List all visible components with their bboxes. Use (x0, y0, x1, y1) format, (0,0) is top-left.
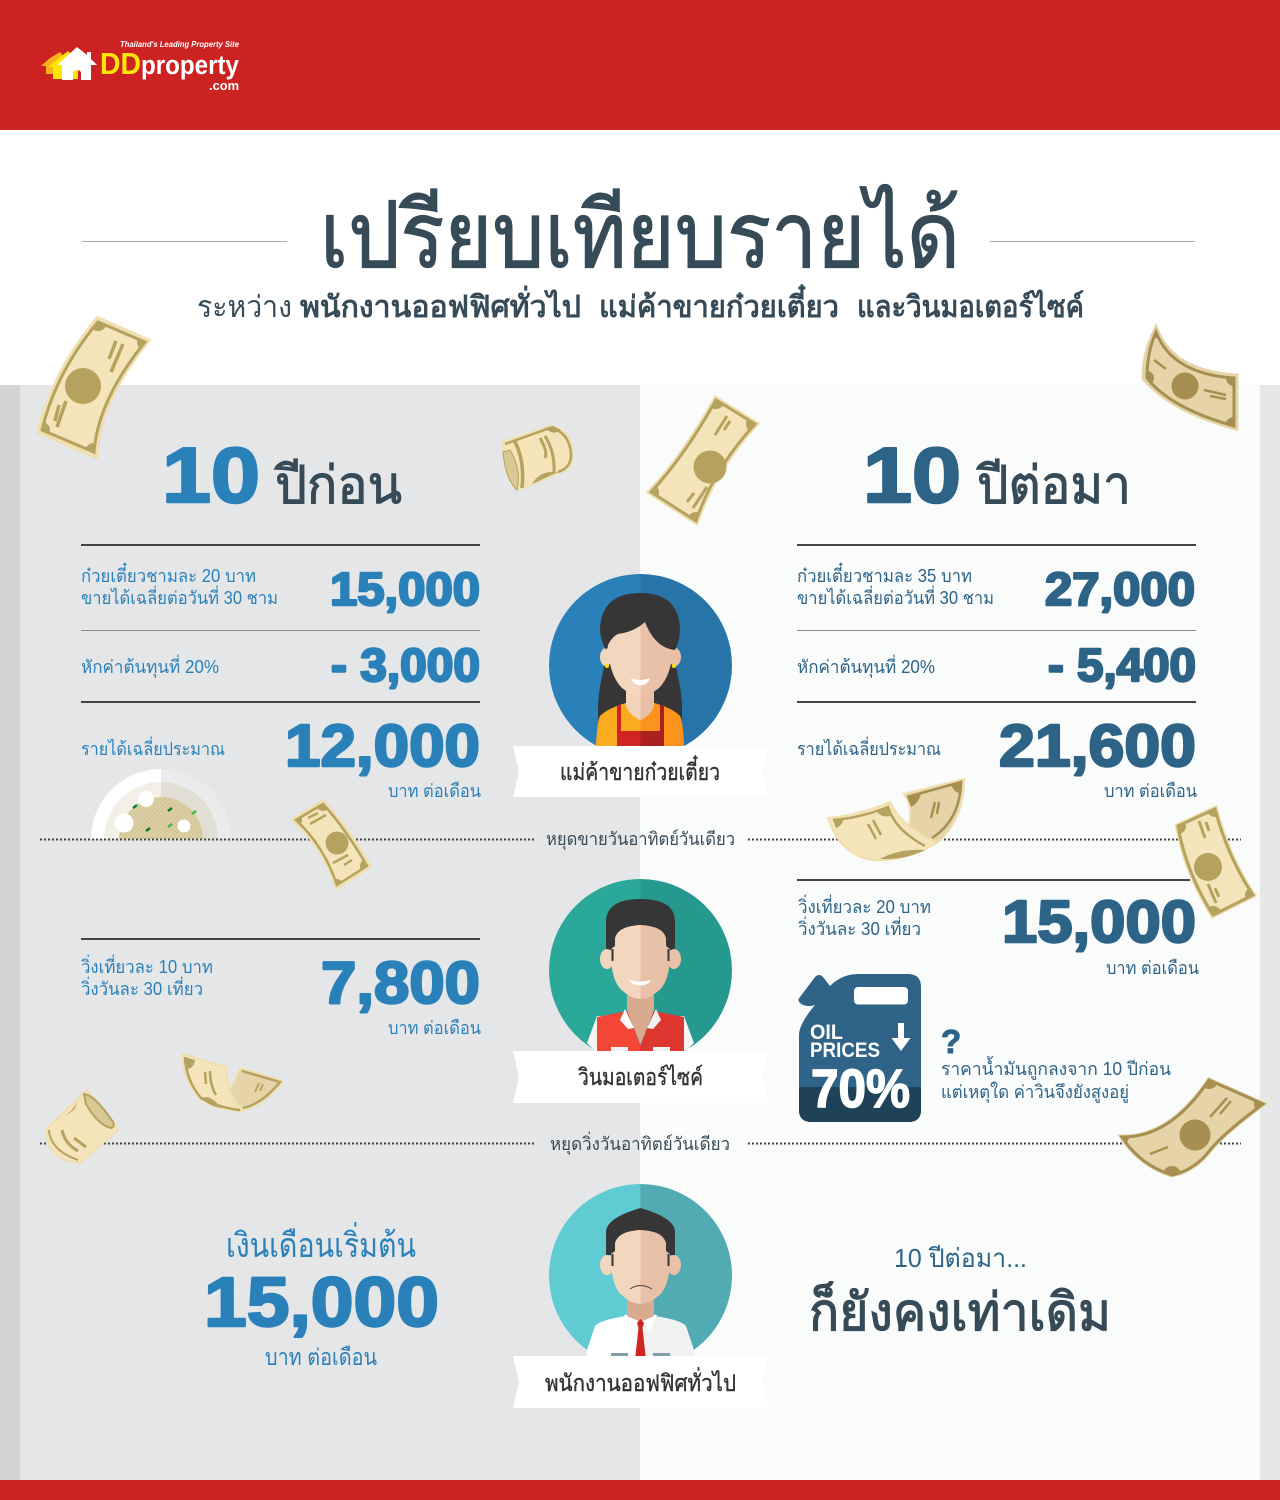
heading: 10 years later (863, 431, 1131, 519)
icon: oil can, prices down 70%: 70% (811, 1059, 910, 1119)
driver income: 10 years later: 15,000 (1002, 889, 1196, 955)
heading: 10 years ago: ปีก่อน (274, 457, 402, 515)
vendor income: 10 years ago: - 3,000 (331, 639, 480, 691)
still the same after 10 years: 10 ปีต่อมา... (894, 1243, 1027, 1273)
icon: oil can, prices down 70% (798, 974, 921, 1122)
oil price note (941, 1023, 1171, 1103)
name banner: office worker (513, 1356, 768, 1408)
driver income: 10 years later (797, 880, 1199, 978)
vendor income: 10 years later: 21,600 (999, 713, 1196, 779)
logo: DDproperty: DD (100, 46, 141, 81)
vendor income: 10 years later: บาท ต่อเดือน (1104, 781, 1197, 801)
subtitle: และวินมอเตอร์ไซค์ (857, 289, 1084, 324)
starting salary: บาท ต่อเดือน (265, 1344, 377, 1370)
driver income: 10 years later: วิ่งเที่ยวละ 20 บาท (798, 894, 931, 917)
character: motorcycle taxi driver (549, 879, 732, 1062)
money bill: beside bowl (290, 797, 374, 891)
header band (0, 0, 1280, 130)
money bill: roll near heading (503, 426, 573, 490)
footer band (0, 1480, 1280, 1500)
money bill: lower right (1118, 1077, 1268, 1178)
driver income: 10 years ago: วิ่งเที่ยวละ 10 บาท (81, 954, 213, 977)
money bill: top center (646, 395, 760, 526)
money bill: right of divider (1174, 804, 1258, 919)
vendor income: 10 years later: ขายได้เฉลี่ยต่อวันที่ 30 ชาม (797, 585, 994, 608)
money bill: roll lower left (46, 1090, 118, 1163)
driver income: 10 years ago: 7,800 (321, 950, 480, 1016)
vendor income: 10 years later: รายได้เฉลี่ยประมาณ (797, 736, 941, 759)
subtitle: ระหว่าง (197, 291, 292, 324)
divider: driver rests on Sunday: หยุดวิ่งวันอาทิตย์วันเดียว (550, 1131, 730, 1155)
money bill: folded center right (828, 779, 964, 860)
icon: oil can, prices down 70%: PRICES (810, 1039, 880, 1062)
vendor income: 10 years ago: บาท ต่อเดือน (388, 781, 481, 801)
oil price note: แต่เหตุใด ค่าวินจึงยังสูงอยู่ (941, 1081, 1129, 1103)
money bill: top right (1140, 326, 1243, 435)
vendor income: 10 years ago: 12,000 (285, 713, 480, 779)
starting salary: 15,000 (204, 1263, 439, 1341)
vendor income: 10 years ago: 15,000 (330, 563, 480, 615)
starting salary (204, 1222, 439, 1370)
vendor income: 10 years ago: ขายได้เฉลี่ยต่อวันที่ 30 ชาม (81, 585, 278, 608)
subtitle: แม่ค้าขายก๋วยเตี๋ยว (599, 284, 839, 324)
character: noodle vendor (549, 574, 732, 757)
name banner: noodle vendor: แม่ค้าขายก๋วยเตี๋ยว (560, 755, 720, 785)
logo: DDproperty: Thailand's Leading Property Site (120, 39, 239, 49)
vendor income: 10 years ago: หักค่าต้นทุนที่ 20% (81, 654, 219, 678)
oil price note: ? (941, 1023, 961, 1060)
subtitle: พนักงานออฟฟิศทั่วไป (300, 285, 581, 324)
vendor income: 10 years later: หักค่าต้นทุนที่ 20% (797, 654, 935, 678)
vendor income: 10 years later (797, 545, 1197, 801)
icon: noodle bowl (91, 769, 231, 839)
heading: 10 years later: 10 (863, 431, 961, 519)
still the same after 10 years (809, 1243, 1111, 1342)
vendor income: 10 years later: ก๋วยเตี๋ยวชามละ 35 บาท (797, 562, 972, 586)
starting salary: เงินเดือนเริ่มต้น (226, 1222, 416, 1265)
name banner: noodle vendor (513, 746, 768, 797)
vendor income: 10 years later: - 5,400 (1048, 639, 1196, 691)
character: office worker (549, 1184, 732, 1367)
divider: vendor rests on Sunday: หยุดขายวันอาทิตย์วันเดียว (546, 829, 735, 850)
icon: houses (41, 47, 97, 80)
name banner: motorcycle taxi driver: วินมอเตอร์ไซค์ (578, 1064, 703, 1090)
heading: 10 years later: ปีต่อมา (976, 457, 1131, 515)
logo: DDproperty: .com (209, 78, 239, 93)
still the same after 10 years: ก็ยังคงเท่าเดิม (809, 1282, 1111, 1342)
vendor income: 10 years later: 27,000 (1045, 563, 1195, 615)
money bill: top left (34, 313, 153, 461)
subtitle (197, 284, 1084, 324)
vendor income: 10 years ago: ก๋วยเตี๋ยวชามละ 20 บาท (81, 562, 256, 586)
logo: DDproperty (41, 39, 239, 93)
name banner: motorcycle taxi driver (513, 1051, 768, 1103)
logo: DDproperty: property (141, 50, 239, 80)
heading: 10 years ago (162, 431, 402, 519)
driver income: 10 years later: บาท ต่อเดือน (1106, 958, 1199, 978)
vendor income: 10 years ago: รายได้เฉลี่ยประมาณ (81, 736, 225, 759)
driver income: 10 years later: วิ่งวันละ 30 เที่ยว (798, 916, 921, 939)
money bill: folded lower left (183, 1054, 283, 1111)
driver income: 10 years ago: บาท ต่อเดือน (388, 1018, 481, 1038)
heading: 10 years ago: 10 (162, 431, 260, 519)
vendor income: 10 years ago (81, 545, 481, 801)
driver income: 10 years ago: วิ่งวันละ 30 เที่ยว (81, 976, 203, 999)
name banner: office worker: พนักงานออฟฟิศทั่วไป (545, 1367, 736, 1396)
oil price note: ราคาน้ำมันถูกลงจาก 10 ปีก่อน (941, 1056, 1171, 1080)
title: เปรียบเทียบรายได้ (320, 185, 960, 287)
icon: oil can, prices down 70%: OIL (810, 1021, 843, 1044)
driver income: 10 years ago (81, 939, 481, 1038)
